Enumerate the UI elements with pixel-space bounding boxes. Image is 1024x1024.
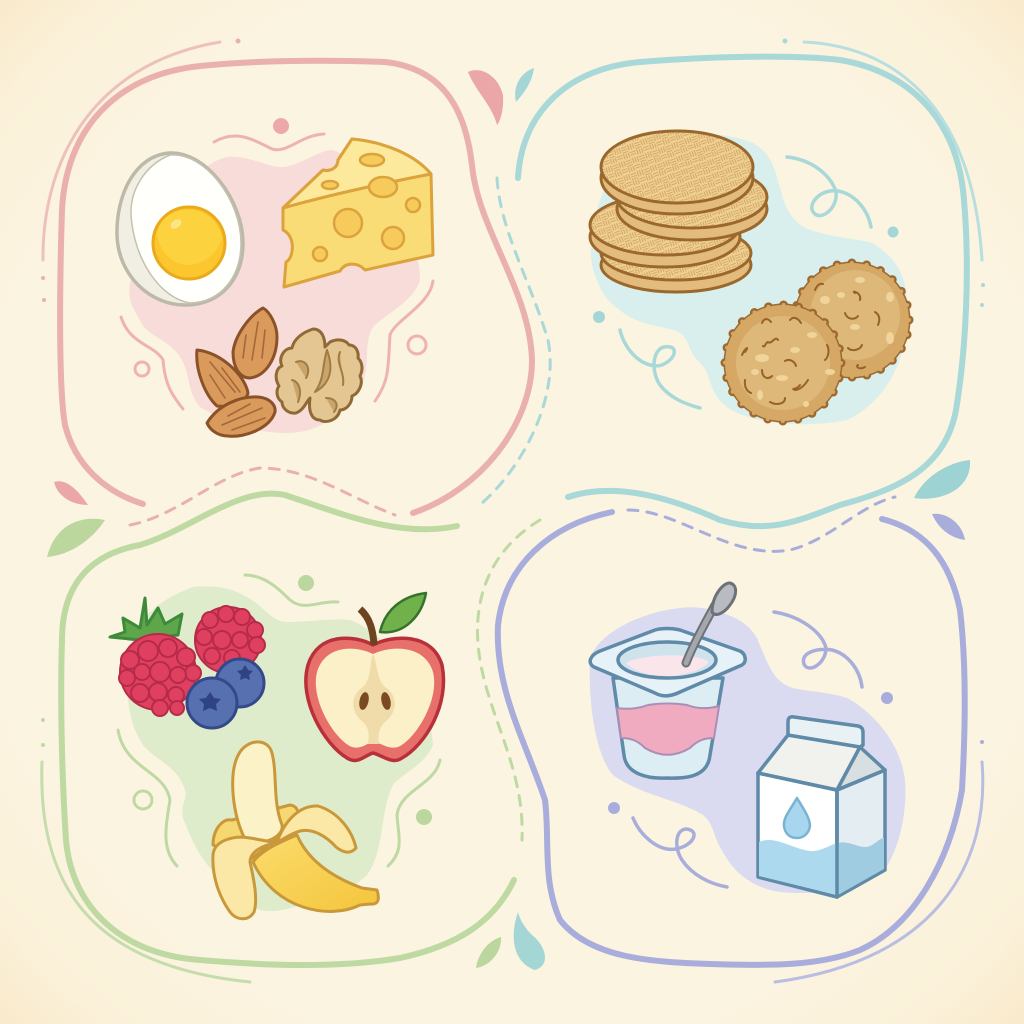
icon: banana [213, 742, 378, 919]
pink blob [129, 150, 420, 433]
lavender droplets [932, 514, 965, 540]
panel: dairy (lavender) [498, 512, 984, 982]
connector: dashed paths between panels [130, 178, 895, 840]
pink frame [60, 61, 532, 513]
icon: boiled egg [117, 153, 243, 305]
teal squiggles [787, 157, 871, 227]
pink droplets [468, 70, 503, 125]
panel: protein (pink) [41, 38, 532, 513]
icon: yogurt cup with spoon [590, 583, 745, 778]
lavender frame [498, 512, 965, 965]
teal blob [591, 133, 908, 424]
green droplets [47, 519, 105, 557]
icon: milk carton [758, 717, 885, 897]
green frame [61, 494, 514, 965]
icon: berries [110, 598, 265, 728]
teal droplets [515, 68, 534, 102]
teal droplet bottom center [514, 912, 545, 970]
panel: fruit (green) [41, 494, 514, 982]
icon: walnut [276, 329, 362, 422]
icon: apple half [306, 593, 444, 760]
teal outer accent line [804, 42, 982, 260]
pink outer accent line [43, 42, 220, 260]
icon: cheese wedge [283, 139, 433, 287]
green outer accent line [42, 762, 250, 982]
lavender blob [590, 607, 905, 893]
panel: grains (teal) [515, 38, 985, 526]
green blob [127, 586, 433, 911]
icon: almonds [197, 308, 277, 436]
icon: stacked crackers [590, 131, 767, 292]
lavender squiggles [774, 612, 862, 687]
icon: oat cookies [724, 262, 910, 422]
teal frame [518, 57, 967, 526]
lavender outer accent line [775, 762, 983, 982]
green squiggles [245, 575, 338, 605]
pink squiggles [214, 134, 324, 150]
